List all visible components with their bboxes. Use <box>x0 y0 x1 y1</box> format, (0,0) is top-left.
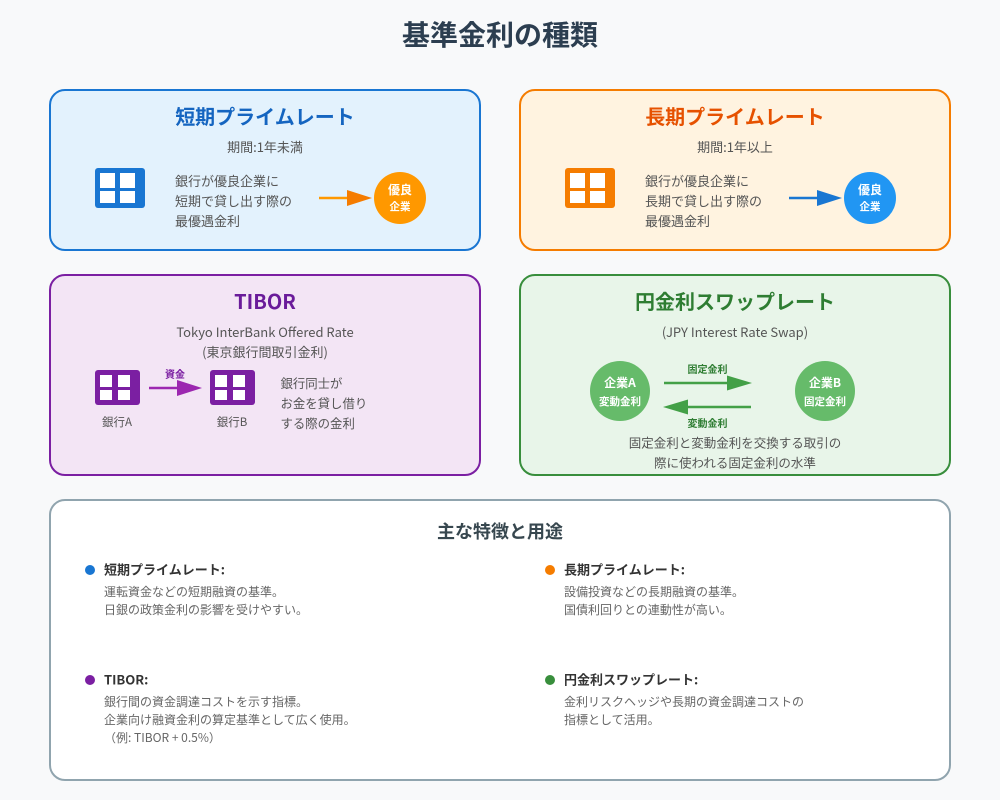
description: 銀行同士が <box>280 374 343 392</box>
period text: 期間:1年以上 <box>697 137 773 156</box>
description: する際の金利 <box>280 414 355 432</box>
item: swap <box>545 670 804 728</box>
subtitle: (東京銀行間取引金利) <box>202 342 328 361</box>
icon: prime company <box>374 172 426 224</box>
item: long-term: 国債利回りとの連動性が高い。 <box>564 601 732 618</box>
description <box>175 171 292 230</box>
company A: 変動金利 <box>599 394 641 409</box>
item: short-term: 運転資金などの短期融資の基準。 <box>104 583 284 600</box>
arrow <box>319 190 372 206</box>
description <box>280 374 367 432</box>
panel: TIBOR <box>50 275 480 475</box>
label: bank B: 銀行B <box>217 414 248 430</box>
label: bank A: 銀行A <box>102 414 132 430</box>
description: 銀行が優良企業に <box>175 171 279 190</box>
period text: 期間:1年未満 <box>227 137 303 156</box>
label: floating rate: 変動金利 <box>688 415 728 430</box>
description: お金を貸し借り <box>280 394 367 412</box>
item: TIBOR: 銀行間の資金調達コストを示す指標。 <box>104 693 308 710</box>
icon: bank B <box>210 370 255 405</box>
heading: swap rate: 円金利スワップレート <box>635 286 835 315</box>
icon: prime company: 企業 <box>860 199 881 214</box>
item: TIBOR: TIBOR: <box>104 670 148 688</box>
description: 長期で貸し出す際の <box>645 191 762 210</box>
company A: 企業A <box>604 374 636 391</box>
heading: long-term prime rate: 長期プライムレート <box>645 101 825 130</box>
heading: short-term prime rate: 短期プライムレート <box>175 101 355 130</box>
item: TIBOR: 企業向け融資金利の算定基準として広く使用。 <box>104 711 356 728</box>
subtitle: Tokyo InterBank Offered Rate <box>176 322 354 341</box>
panel: yen interest rate swap <box>520 275 950 475</box>
description: 固定金利と変動金利を交換する取引の <box>629 432 841 452</box>
panel: features and uses <box>50 500 950 780</box>
icon: prime company: 優良 <box>388 181 412 198</box>
arrow: funds <box>149 380 202 396</box>
item: TIBOR: （例: TIBOR + 0.5%） <box>104 729 221 746</box>
company B <box>795 361 855 421</box>
icon: prime company: 企業 <box>390 199 411 214</box>
label: fixed rate: 固定金利 <box>688 361 728 376</box>
description: 短期で貸し出す際の <box>175 191 292 210</box>
company A <box>590 361 650 421</box>
item: swap: 円金利スワップレート: <box>564 670 698 688</box>
item: short-term <box>85 560 308 618</box>
subtitle <box>176 322 354 361</box>
description <box>629 432 841 472</box>
subtitle: (JPY Interest Rate Swap) <box>662 322 808 341</box>
title: 基準金利の種類 <box>402 14 598 54</box>
description: 最優遇金利 <box>175 211 240 230</box>
icon: bank <box>95 168 145 208</box>
description <box>645 171 762 230</box>
icon: bank A <box>95 370 140 405</box>
description: 銀行が優良企業に <box>645 171 749 190</box>
description: 最優遇金利 <box>645 211 710 230</box>
icon: prime company: 優良 <box>858 181 882 198</box>
description: 際に使われる固定金利の水準 <box>654 452 816 472</box>
heading: features: 主な特徴と用途 <box>437 518 563 544</box>
item: short-term: 短期プライムレート: <box>104 560 225 578</box>
item: TIBOR <box>85 670 356 746</box>
arrow: floating rate <box>663 400 751 414</box>
company B: 固定金利 <box>804 394 846 409</box>
panel: long-term prime rate <box>520 90 950 250</box>
label: funds: 資金 <box>165 366 185 381</box>
item: long-term: 長期プライムレート: <box>564 560 685 578</box>
icon: bank <box>565 168 615 208</box>
item: swap: 金利リスクヘッジや長期の資金調達コストの <box>564 693 804 710</box>
company B: 企業B <box>809 374 841 391</box>
arrow: fixed rate <box>664 376 752 390</box>
item: long-term <box>545 560 744 618</box>
item: long-term: 設備投資などの長期融資の基準。 <box>564 583 744 600</box>
item: short-term: 日銀の政策金利の影響を受けやすい。 <box>104 601 308 618</box>
arrow <box>789 190 842 206</box>
icon: prime company <box>844 172 896 224</box>
item: swap: 指標として活用。 <box>564 711 660 728</box>
panel: short-term prime rate <box>50 90 480 250</box>
heading: TIBOR: TIBOR <box>234 286 296 315</box>
